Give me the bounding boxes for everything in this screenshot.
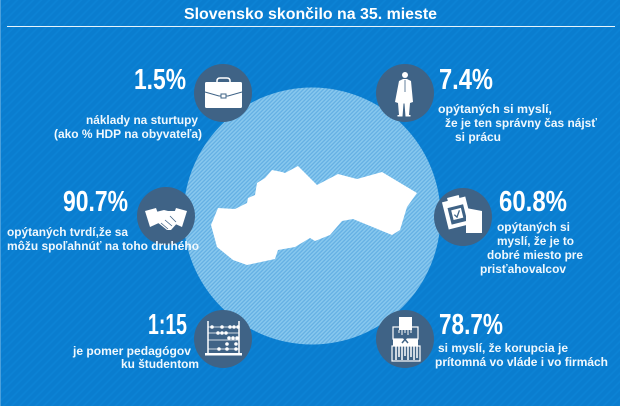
value: 1:15 [148, 309, 187, 341]
icon: briefcase [194, 64, 252, 122]
description: že je ten správny čas nájsť [445, 116, 597, 130]
description: opýtaných si [497, 220, 570, 234]
value: 78.7% [439, 309, 503, 341]
value: 7.4% [439, 64, 493, 96]
description: ku študentom [121, 357, 199, 371]
title: Slovensko skončilo na 35. mieste [184, 6, 437, 23]
value: 90.7% [63, 186, 128, 218]
icon: abacus [194, 310, 252, 368]
stat: corruption [376, 309, 608, 369]
description: môžu spoľahnúť na toho druhého [7, 239, 199, 253]
stat: right time to find a job [376, 64, 597, 144]
description: prítomná vo vláde i vo firmách [435, 355, 608, 369]
description: prisťahovalcov [480, 262, 566, 276]
stat: teacher ratio [72, 309, 252, 371]
description: opýtaných tvrdí,že sa [7, 225, 128, 239]
description: náklady na sturtupy [86, 113, 198, 127]
icon: man in suit [376, 64, 434, 122]
description: (ako % HDP na obyvateľa) [54, 127, 202, 141]
value: 1.5% [134, 64, 186, 96]
description: je pomer pedagógov [72, 344, 191, 358]
stat: immigrants [434, 186, 583, 276]
icon: handshake [137, 187, 195, 245]
description: opýtaných si myslí, [438, 102, 552, 116]
icon: document shredder [376, 310, 434, 368]
value: 60.8% [499, 186, 567, 218]
icon: clipboard and documents [434, 188, 492, 246]
description: myslí, že je to [497, 234, 574, 248]
description: si myslí, že korupcia je [438, 341, 568, 355]
stat: trust [7, 186, 199, 253]
stat: startups [54, 64, 252, 141]
map of Slovakia [211, 166, 417, 265]
description: dobré miesto pre [487, 248, 583, 262]
description: si prácu [455, 130, 501, 144]
hatched central circle [184, 88, 440, 344]
